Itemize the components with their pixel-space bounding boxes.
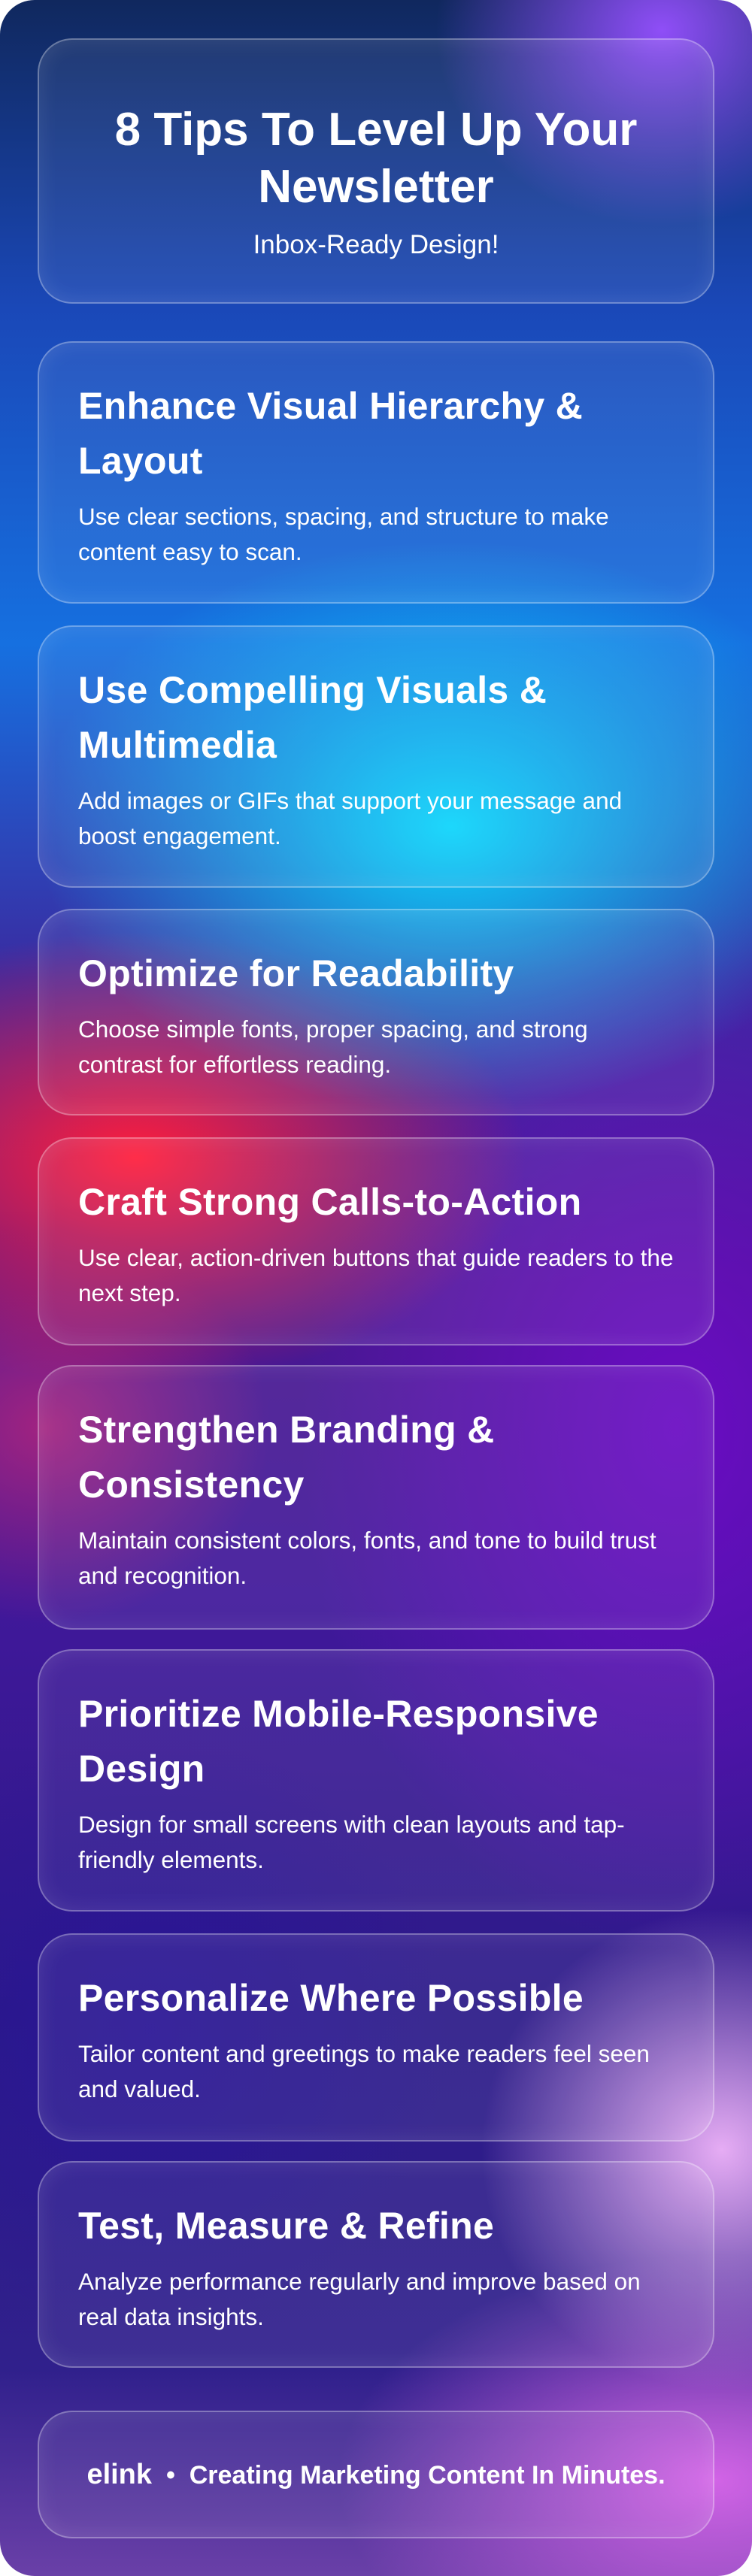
panel: tip 5	[38, 1365, 714, 1630]
text: tip 8: Analyze performance regularly and improve based on real data insights.	[78, 2268, 641, 2330]
text: tip 5: Maintain consistent colors, fonts, and tone to build trust and recognition.	[78, 1527, 656, 1589]
heading: tip 1: Enhance Visual Hierarchy & Layout	[78, 385, 583, 482]
footer text with logo: elink • Creating Marketing Content In Minutes.	[86, 2458, 666, 2490]
panel: tip 6	[38, 1649, 714, 1912]
heading: tip 2: Use Compelling Visuals & Multimedia	[78, 669, 547, 766]
heading: tip 6: Prioritize Mobile-Responsive Design	[78, 1693, 599, 1790]
heading: tip 5: Strengthen Branding & Consistency	[78, 1409, 495, 1506]
panel: tip 8	[38, 2161, 714, 2368]
panel: tip 3	[38, 909, 714, 1115]
subtitle: Inbox-Ready Design!	[253, 230, 499, 259]
panel: tip 4	[38, 1137, 714, 1346]
text: tip 6: Design for small screens with clean layouts and tap-friendly elements.	[78, 1811, 625, 1873]
heading: tip 7: Personalize Where Possible	[78, 1977, 584, 2019]
text: tip 7: Tailor content and greetings to make readers feel seen and valued.	[78, 2040, 650, 2102]
panel: tip 2	[38, 625, 714, 888]
heading: tip 4: Craft Strong Calls-to-Action	[78, 1181, 581, 1223]
panel: tip 1	[38, 341, 714, 604]
panel: title	[38, 38, 714, 304]
text: tip 3: Choose simple fonts, proper spacing, and strong contrast for effortless reading.	[78, 1016, 588, 1078]
text: tip 4: Use clear, action-driven buttons that guide readers to the next step.	[78, 1244, 673, 1306]
text: tip 2: Add images or GIFs that support your message and boost engagement.	[78, 787, 622, 849]
panel: footer	[38, 2411, 714, 2538]
heading: tip 8: Test, Measure & Refine	[78, 2205, 494, 2247]
heading: tip 3: Optimize for Readability	[78, 952, 514, 994]
title: 8 Tips To Level Up Your Newsletter	[115, 104, 637, 213]
text: tip 1: Use clear sections, spacing, and structure to make content easy to scan.	[78, 503, 609, 565]
panel: tip 7	[38, 1933, 714, 2142]
